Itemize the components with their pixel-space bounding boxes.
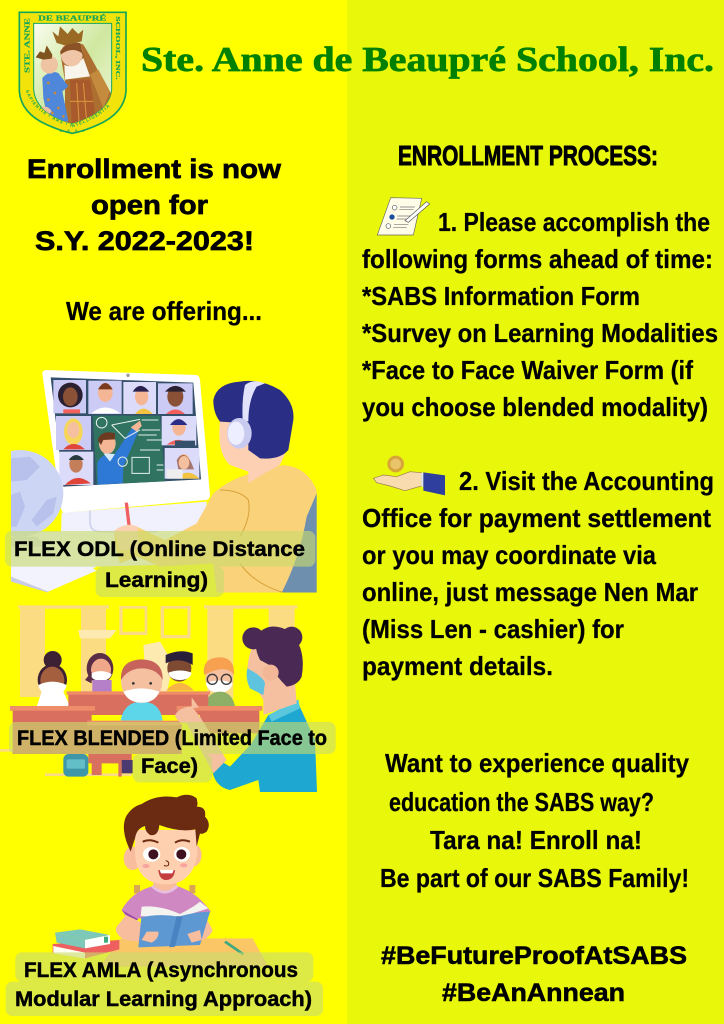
woman robe: [60, 42, 112, 123]
label background: FLEX BLENDED: [9, 722, 336, 782]
woman crown: [52, 26, 83, 45]
stacked books: [53, 940, 119, 958]
label: FLEX ODL: Learning): [105, 569, 208, 592]
woman face: [61, 41, 83, 66]
hair: [124, 795, 209, 852]
child dress: [42, 72, 68, 121]
title: Ste. Anne de Beaupré School, Inc.: [141, 40, 714, 79]
label: FLEX AMLA: [15, 959, 312, 1011]
text: step 1: *Face to Face Waiver Form (if: [362, 355, 693, 385]
label: FLEX BLENDED: FLEX BLENDED (Limited Face to: [17, 727, 327, 750]
pencil: [224, 941, 244, 955]
text: step 1: [362, 207, 718, 422]
text: step 2: payment details.: [362, 651, 553, 681]
child face: [41, 56, 58, 74]
heading: enrollment open: open for: [91, 190, 209, 220]
text: hashtags: #BeAnAnnean: [442, 979, 625, 1007]
school logo crest: [18, 12, 127, 134]
text: we are offering: We are offering...: [66, 296, 262, 326]
heading: enrollment open: S.Y. 2022-2023!: [35, 226, 254, 256]
label: FLEX AMLA: FLEX AMLA (Asynchronous: [24, 959, 298, 982]
student: [115, 465, 317, 593]
label: FLEX BLENDED: [17, 727, 327, 778]
text: call to action: [380, 748, 689, 893]
text: step 2: online, just message Nen Mar: [362, 577, 698, 607]
monitor: [42, 370, 210, 513]
logo text: de Beaupré: DE BEAUPRÉ: [38, 13, 107, 23]
text: step 1: *SABS Information Form: [362, 281, 640, 311]
shirt and arms: [122, 886, 211, 920]
logo text: Ste. Anne: STE. ANNE: [23, 17, 31, 73]
floor lines: [0, 749, 132, 776]
main boy: [121, 659, 163, 721]
text: step 2: [362, 466, 714, 681]
label: FLEX BLENDED: Face): [141, 755, 198, 778]
backpack: [63, 754, 88, 777]
text: hashtags: [381, 942, 687, 1007]
book: [141, 902, 208, 918]
logo text: School, Inc.: SCHOOL, INC.: [114, 16, 121, 80]
panel: left yellow background: [0, 0, 347, 1024]
illustration: boy reading a book: [6, 795, 323, 1016]
face: [124, 847, 142, 870]
panel: right lime background: [347, 0, 724, 1024]
text: call to action: education the SABS way?: [389, 787, 654, 817]
illustration: limited face to face classroom: [0, 605, 336, 792]
veil: [64, 58, 90, 80]
teacher on screen: [97, 421, 142, 485]
icon: form and pen: [377, 198, 430, 235]
illustration: online distance learning: [0, 370, 317, 597]
heading: enrollment open: [27, 154, 282, 256]
text: step 2: Office for payment settlement: [362, 503, 711, 533]
front desks: [13, 710, 259, 777]
heading: enrollment open: Enrollment is now: [27, 154, 282, 184]
text: hashtags: #BeFutureProofAtSABS: [381, 942, 687, 970]
students: [37, 651, 235, 707]
back desk: [68, 694, 208, 715]
label: FLEX AMLA: Modular Learning Approach): [15, 988, 312, 1011]
text: call to action: Tara na! Enroll na!: [430, 825, 642, 855]
globe: [11, 450, 64, 546]
text: step 2: (Miss Len - cashier) for: [362, 614, 624, 644]
text: step 2: or you may coordinate via: [362, 540, 656, 570]
windows and wall: [18, 605, 297, 699]
table: [100, 938, 268, 967]
label background: FLEX AMLA: [6, 952, 323, 1016]
eyes and mouth: [143, 847, 160, 862]
label: FLEX ODL: [14, 538, 305, 592]
text: call to action: Want to experience quality: [385, 748, 689, 778]
label: FLEX ODL: FLEX ODL (Online Distance: [14, 538, 305, 561]
label background: FLEX ODL: [5, 531, 315, 597]
logo text: year: 1 8 8 7: [60, 128, 86, 133]
teacher: [175, 627, 317, 792]
icon: hand with coin: [373, 456, 445, 495]
text: call to action: Be part of our SABS Family!: [380, 863, 689, 893]
logo text: motto: SAPIENTIA • ARS • INTELLIGENTIA: [26, 90, 110, 128]
